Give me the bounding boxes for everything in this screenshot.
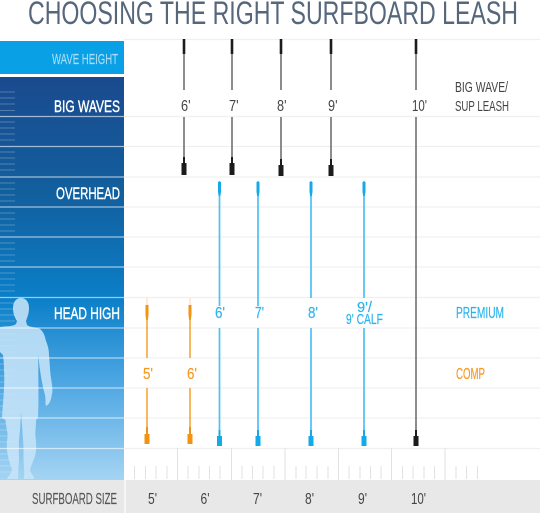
- comp leashes: 6': [187, 366, 197, 383]
- panel: surfboard size bar: [0, 480, 540, 513]
- panel: surfboard size bar: 6': [200, 491, 210, 508]
- label: overhead: OVERHEAD: [56, 184, 120, 203]
- big wave leashes: 10': [412, 98, 427, 115]
- legend: big wave / sup leash: SUP LEASH: [455, 98, 509, 115]
- big wave leashes: 7': [229, 98, 239, 115]
- legend: big wave / sup leash: BIG WAVE/: [455, 79, 509, 96]
- big wave leashes: [181, 39, 427, 446]
- panel: wave height header: WAVE HEIGHT: [52, 51, 118, 68]
- premium leashes: [215, 181, 384, 446]
- legend: comp: COMP: [456, 366, 485, 383]
- big wave leashes: 9': [328, 98, 338, 115]
- panel: surfboard size bar: 7': [253, 491, 262, 508]
- premium leashes: 7': [255, 305, 264, 322]
- premium leashes: 9'/: [357, 300, 373, 316]
- premium leashes: 9' CALF: [346, 312, 383, 328]
- panel: wave height header: [0, 41, 124, 74]
- comp leashes: [143, 298, 197, 444]
- big wave leashes: 6': [181, 98, 191, 115]
- panel: surfboard size bar: 5': [148, 491, 157, 508]
- legend: premium: PREMIUM: [456, 305, 504, 322]
- label: big waves: BIG WAVES: [54, 98, 120, 116]
- grid lines: [124, 40, 540, 448]
- surfboard ruler ticks: [134, 448, 478, 480]
- big wave leashes: 8': [277, 98, 287, 115]
- icon: human silhouette: [0, 298, 52, 479]
- panel: surfboard size bar: 10': [411, 491, 426, 508]
- comp leashes: 5': [143, 366, 153, 383]
- label: head high: HEAD HIGH: [54, 304, 120, 323]
- premium leashes: 8': [308, 305, 318, 322]
- panel: surfboard size bar: 9': [358, 491, 367, 508]
- panel: wave height scale: [0, 77, 124, 480]
- panel: surfboard size bar: SURFBOARD SIZE: [32, 491, 117, 508]
- panel: surfboard size bar: 8': [305, 491, 314, 508]
- legend: big wave / sup leash: [455, 79, 509, 115]
- premium leashes: 6': [215, 305, 225, 322]
